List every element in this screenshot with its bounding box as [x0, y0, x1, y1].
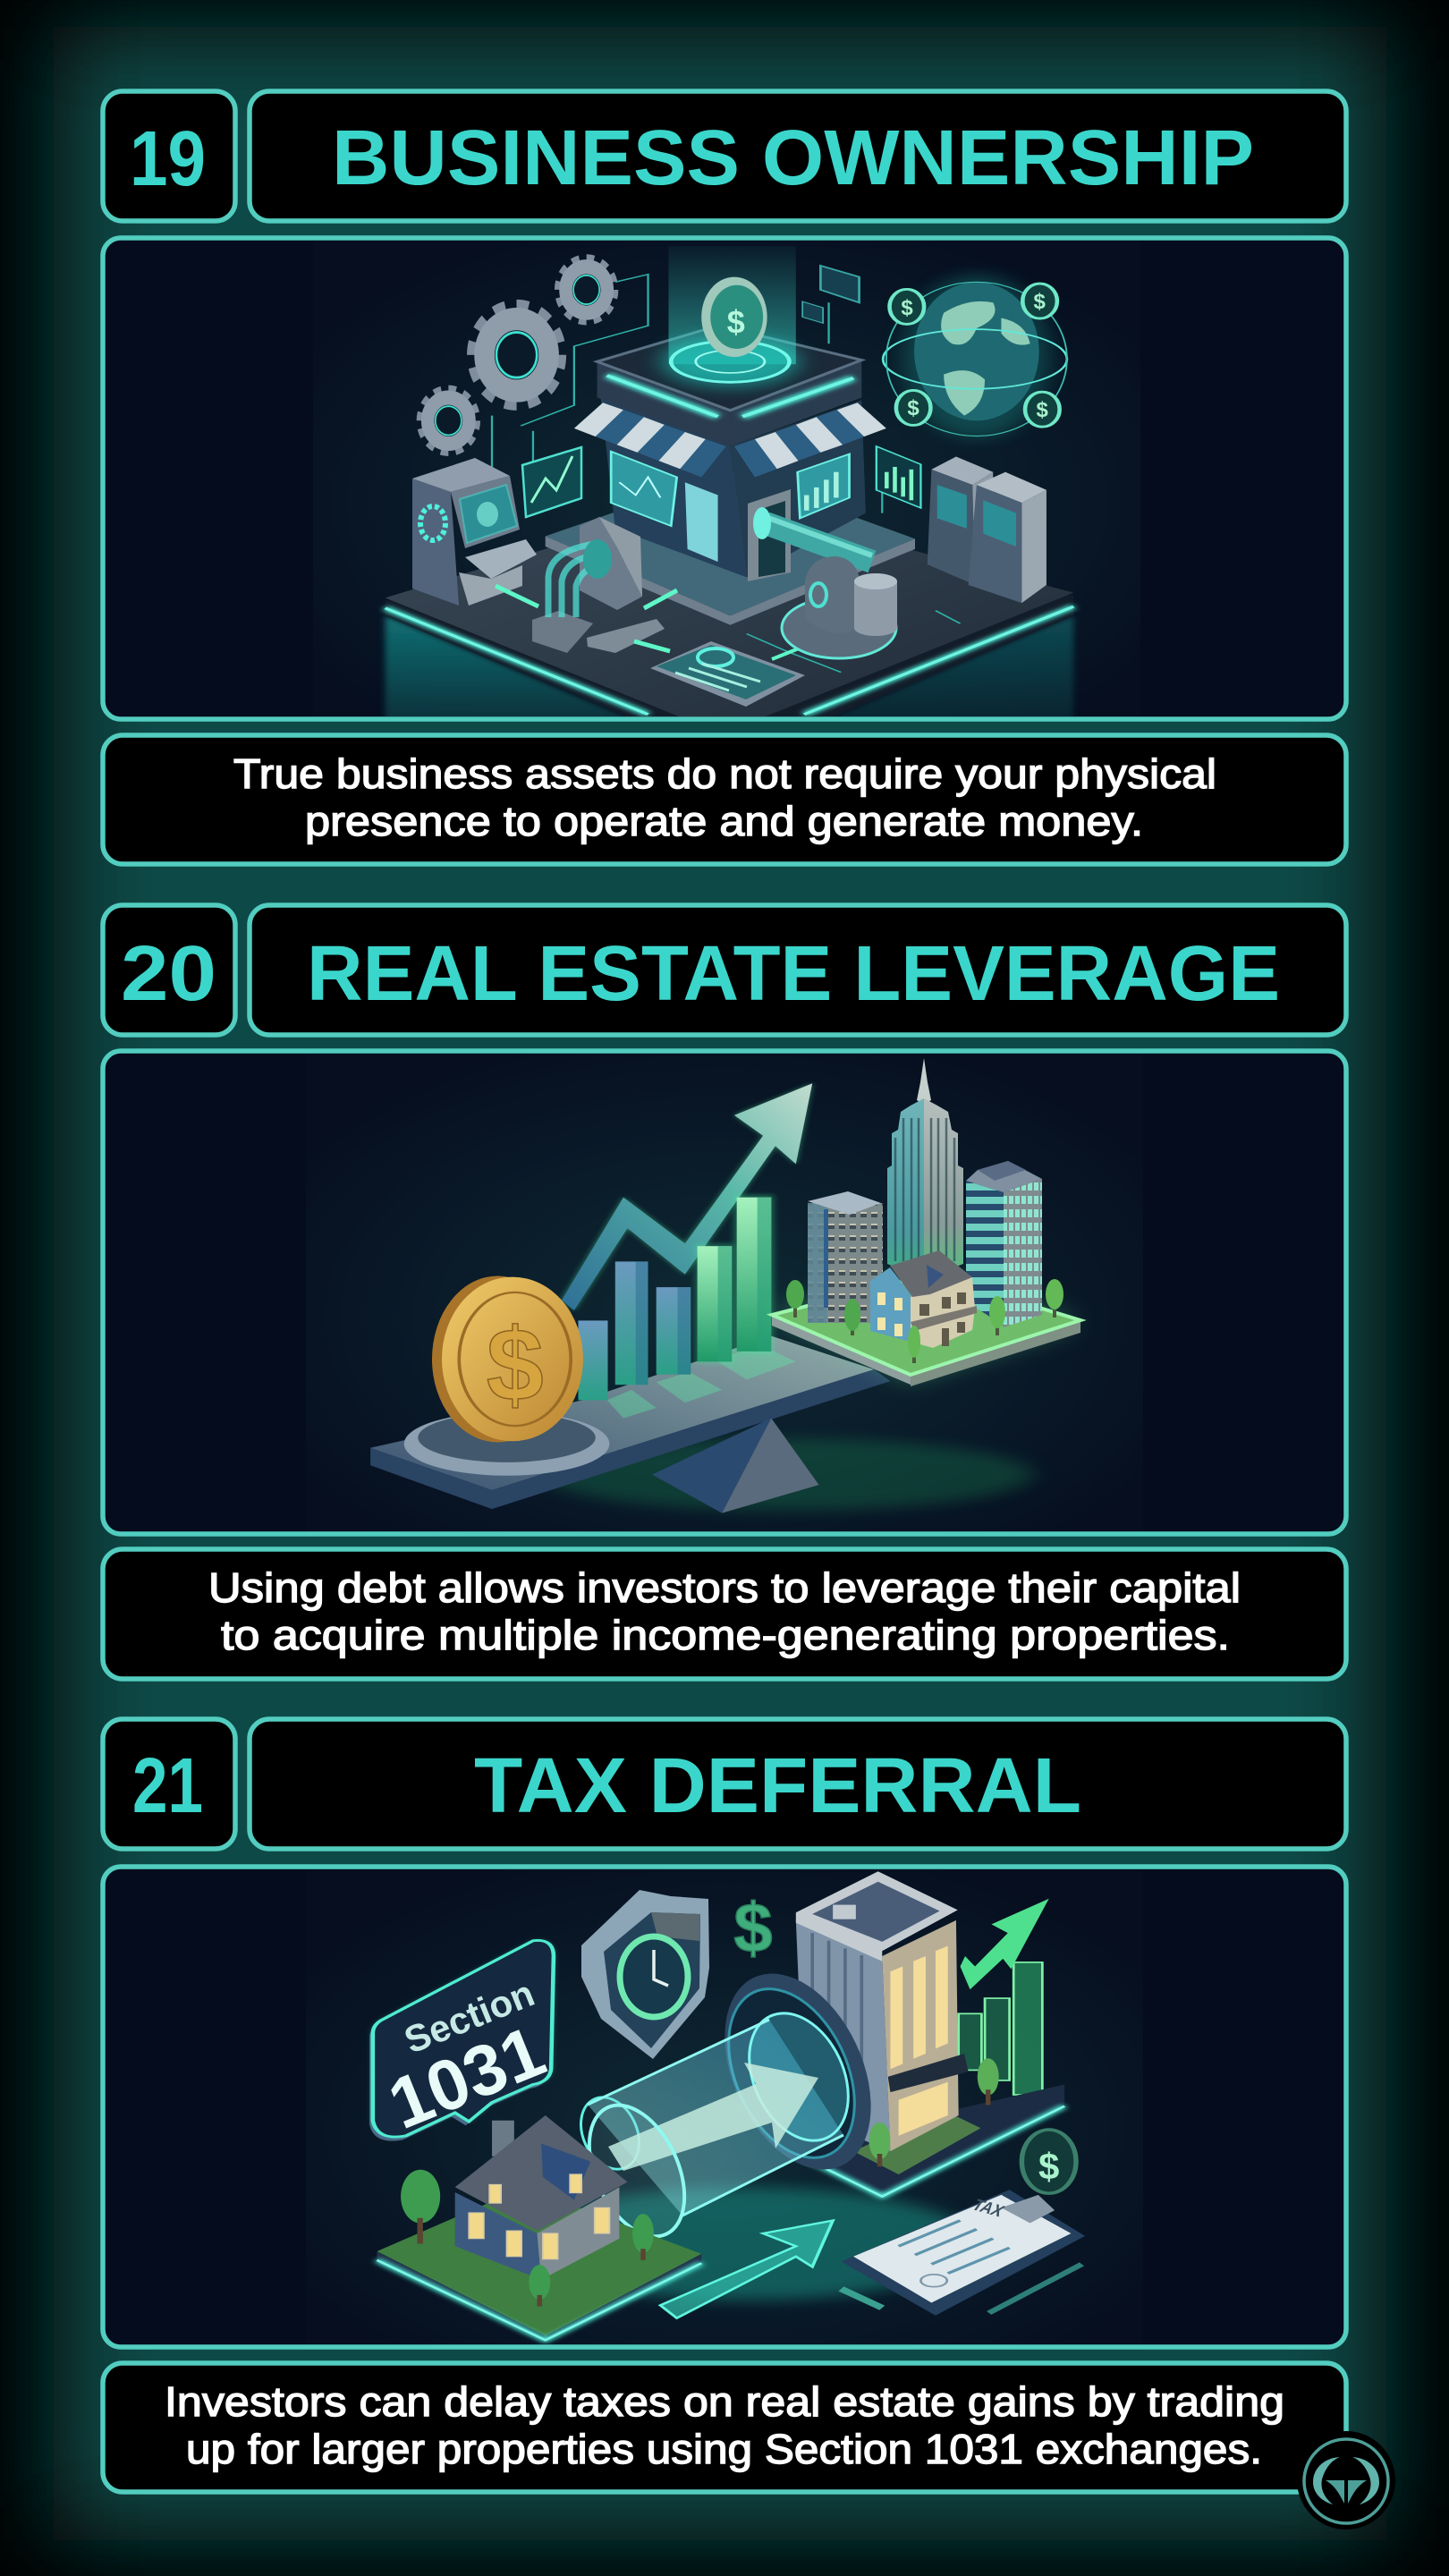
conveyor and coin stack — [748, 489, 897, 658]
speech bubble — [369, 1945, 550, 2141]
description: business ownership: presence to operate and generate money. — [305, 798, 1143, 844]
server racks — [931, 456, 993, 485]
number badge 21 — [103, 1719, 235, 1849]
section 21: tax deferral — [103, 1719, 1346, 2492]
panel: business illustration: $ — [1036, 398, 1048, 422]
chart tile right — [877, 446, 920, 508]
dollar sign: $ — [733, 1888, 773, 1967]
number badge 19 — [103, 91, 235, 221]
chart tile left — [522, 447, 581, 517]
logo badge — [1297, 2431, 1395, 2529]
coin on plate — [404, 1412, 609, 1476]
number badge 20 — [103, 905, 235, 1035]
heading: tax deferral — [250, 1719, 1346, 1849]
description: real estate leverage: Using debt allows investors to leverage their capital — [208, 1564, 1241, 1611]
pipe machine — [496, 517, 817, 659]
dollar coin — [1021, 2130, 1076, 2193]
house platform — [377, 2187, 701, 2336]
city platform — [772, 1275, 1080, 1386]
lever beam — [370, 1369, 890, 1509]
clipboard — [841, 2190, 1085, 2316]
fulcrum — [652, 1418, 771, 1513]
heading: business ownership: BUSINESS OWNERSHIP — [332, 114, 1254, 201]
holographic coin on roof — [668, 246, 796, 364]
apartment block — [808, 1191, 883, 1323]
office tower — [796, 1920, 890, 2151]
growth arrow — [562, 1083, 812, 1310]
trees — [786, 1279, 1063, 1363]
panel: business illustration: $ — [901, 296, 913, 320]
house — [870, 1250, 977, 1348]
panel: business illustration — [103, 238, 1346, 733]
number badge 19: 19 — [130, 115, 206, 202]
skyscraper — [887, 1058, 963, 1279]
shield with clock — [581, 1890, 709, 2059]
bars — [578, 1195, 774, 1400]
panel: tax deferral illustration — [103, 1867, 1346, 2347]
panel: tax deferral illustration: $ — [1038, 2146, 1059, 2188]
green bars and arrow — [959, 1962, 1042, 2095]
panel: tax deferral illustration: TAX — [969, 2196, 1009, 2220]
description: tax deferral — [103, 2363, 1346, 2492]
description: tax deferral: up for larger properties using Section 1031 exchanges. — [186, 2426, 1262, 2472]
description: tax deferral: Investors can delay taxes on real estate gains by trading — [165, 2378, 1284, 2425]
section 19: business ownership — [103, 91, 1346, 864]
panel: business illustration: $ — [907, 396, 919, 420]
trees — [401, 2058, 999, 2306]
number badge 20: 20 — [121, 930, 216, 1017]
panel: business illustration: $ — [727, 304, 745, 341]
heading: business ownership — [250, 91, 1346, 221]
description: real estate leverage — [103, 1549, 1346, 1679]
section 20: real estate leverage — [103, 905, 1346, 1679]
panel: leverage illustration: $ — [487, 1308, 544, 1422]
description: business ownership — [103, 735, 1346, 864]
storefront — [600, 395, 747, 577]
globe with coins — [902, 275, 1051, 438]
house — [492, 2121, 514, 2157]
panel: leverage illustration — [103, 1051, 1346, 1534]
section 1031 label: 1031 — [378, 2011, 555, 2144]
awnings — [574, 402, 886, 477]
ATM terminal — [412, 458, 537, 606]
description: real estate leverage: to acquire multiple income-generating properties. — [221, 1612, 1230, 1658]
portal ring — [696, 1950, 900, 2193]
heading: real estate leverage — [250, 905, 1346, 1035]
pen — [989, 2264, 1081, 2313]
connector lines — [492, 275, 961, 673]
description: business ownership: True business assets do not require your physical — [233, 750, 1216, 797]
glass tower — [966, 1161, 1042, 1327]
panel: business illustration: $ — [1033, 290, 1046, 314]
transfer tube and arrow — [570, 1997, 868, 2251]
tablet — [650, 641, 805, 707]
heading: tax deferral: TAX DEFERRAL — [474, 1742, 1081, 1829]
number badge 21: 21 — [132, 1742, 203, 1829]
floating cards — [820, 266, 860, 302]
building platform — [796, 2084, 1064, 2197]
neon arrow — [660, 2221, 833, 2318]
gears — [472, 306, 561, 404]
heading: real estate leverage: REAL ESTATE LEVERAGE — [307, 930, 1280, 1017]
section 1031 label: Section — [398, 1971, 540, 2062]
